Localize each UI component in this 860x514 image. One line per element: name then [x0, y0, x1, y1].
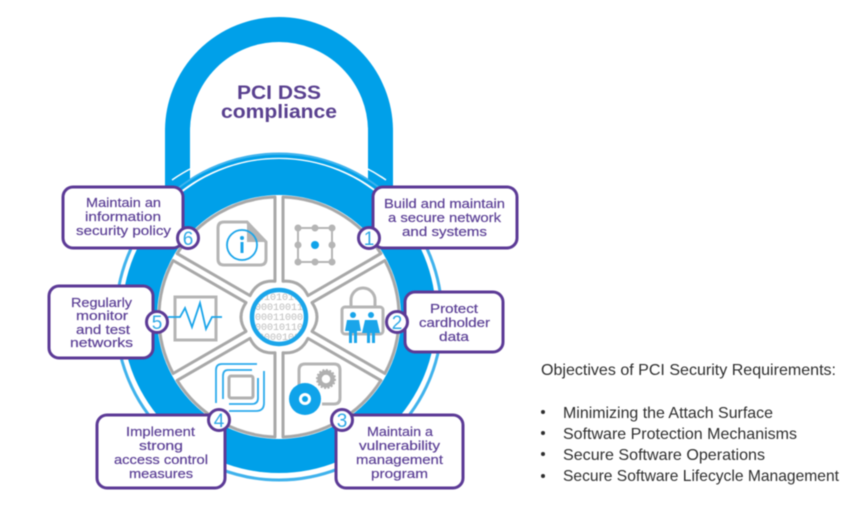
callout 1: build and maintain: Build and maintain	[384, 196, 505, 211]
callout 5: monitor and test: Regularly	[71, 295, 133, 310]
callout 3: vulnerability management	[332, 410, 463, 488]
callout 6: security policy: information	[85, 209, 161, 224]
objectives list	[541, 405, 840, 485]
callout 4: access control: access control	[114, 452, 208, 467]
outer ring	[116, 154, 442, 480]
callout 3: vulnerability management: 3	[337, 411, 347, 432]
objectives list: Secure Software Lifecycle Management	[563, 468, 840, 485]
objectives list: Minimizing the Attach Surface	[563, 405, 773, 422]
icon: network grid	[294, 224, 336, 266]
title: PCI DSS	[237, 83, 321, 104]
callout 4: access control	[97, 410, 230, 488]
icon: nested access squares	[216, 364, 264, 411]
icon: heartbeat monitor	[168, 297, 222, 340]
callout 1: build and maintain: and systems	[402, 224, 488, 239]
callout 3: vulnerability management: vulnerability	[359, 438, 441, 453]
callout 4: access control: 4	[214, 411, 225, 432]
central binary hub: 0000100	[258, 333, 300, 344]
callout 1: build and maintain: 1	[364, 229, 374, 250]
callout 3: vulnerability management: Maintain a	[367, 424, 434, 439]
objectives heading: Objectives of PCI Security Requirements:	[541, 362, 836, 379]
central binary hub: 00010110	[255, 323, 303, 334]
central binary hub: 00011000	[255, 313, 303, 324]
objectives list: Secure Software Operations	[563, 447, 765, 464]
shackle	[178, 30, 380, 200]
callout 2: protect cardholder data: Protect	[430, 301, 478, 316]
callout 5: monitor and test: and test	[76, 322, 130, 337]
callout 6: security policy: 6	[183, 229, 193, 250]
wheel segments	[159, 185, 399, 449]
central binary hub: 00010011	[255, 303, 303, 314]
callout 2: protect cardholder data: 2	[392, 313, 402, 334]
callout 1: build and maintain	[358, 187, 517, 250]
callout 5: monitor and test: 5	[152, 313, 162, 334]
callout 6: security policy	[63, 187, 198, 250]
callout 3: vulnerability management: management	[356, 452, 443, 467]
callout 4: access control: measures	[129, 466, 194, 481]
callout 5: monitor and test	[49, 286, 168, 358]
white wheel backing	[157, 195, 401, 439]
central binary hub	[252, 290, 306, 344]
icon: people in padlock	[342, 288, 383, 343]
icon: information document	[218, 222, 266, 265]
objectives list: Software Protection Mechanisms	[563, 426, 797, 443]
callout 5: monitor and test: networks	[70, 335, 134, 350]
title	[221, 83, 337, 123]
padlock body and shackle	[116, 30, 442, 480]
callout 2: protect cardholder data	[386, 292, 503, 352]
callout 2: protect cardholder data: cardholder	[419, 315, 491, 330]
callout 6: security policy: security policy	[76, 223, 172, 238]
callout 6: security policy: Maintain an	[86, 195, 161, 210]
callout 2: protect cardholder data: data	[439, 329, 470, 344]
callout 3: vulnerability management: program	[371, 466, 428, 481]
callout 4: access control: Implement	[126, 424, 195, 439]
callout 1: build and maintain: a secure network	[388, 210, 502, 225]
icon: disc and gear	[289, 364, 340, 415]
callout 5: monitor and test: monitor	[76, 308, 129, 323]
title: compliance	[221, 102, 337, 123]
callout 4: access control: strong	[139, 438, 183, 453]
blue disc	[122, 159, 436, 473]
central binary hub: 0101010	[258, 293, 300, 304]
